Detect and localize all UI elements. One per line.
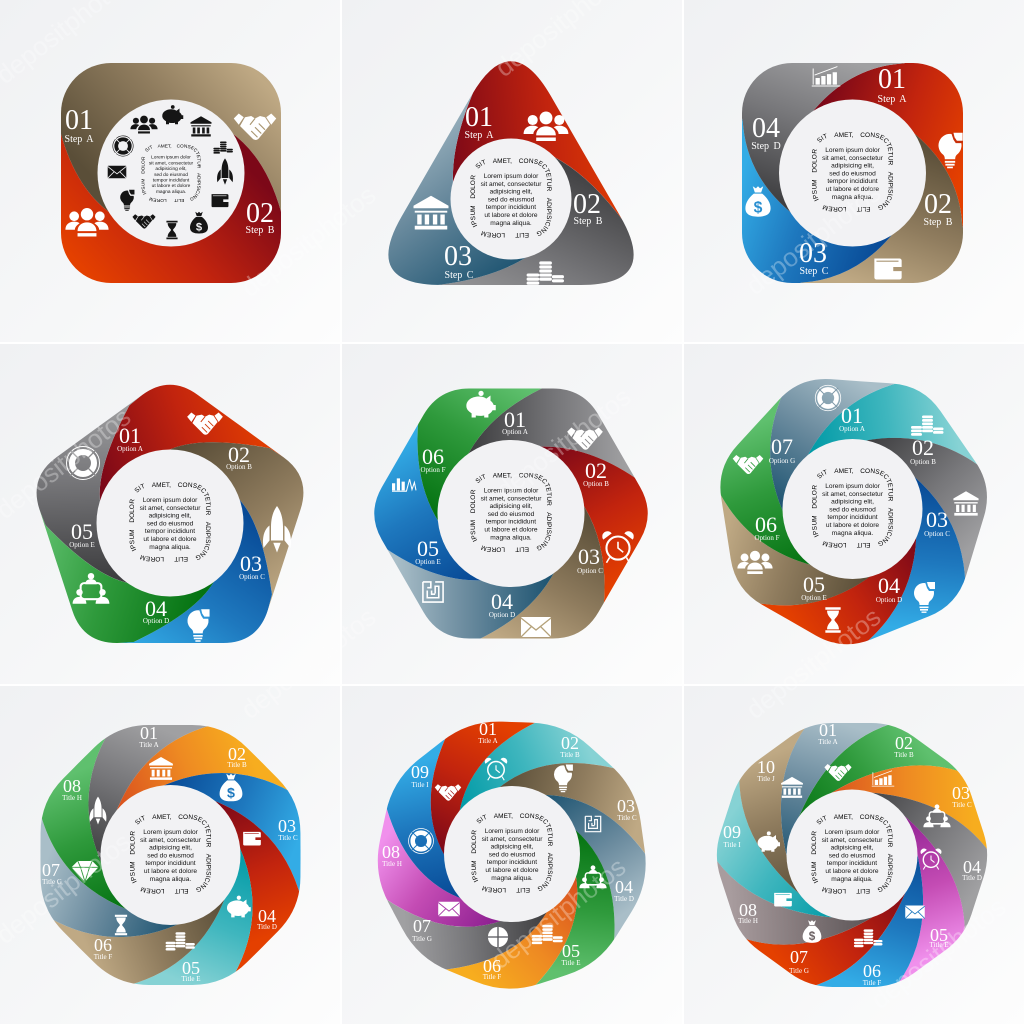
title labels: 01 (819, 720, 837, 740)
title labels: 01 (479, 719, 497, 739)
option labels: Option B (583, 480, 609, 488)
step labels: 02 (573, 189, 601, 220)
blades and ring: sed do eiusmod (488, 196, 535, 203)
watermark: depositphotos (235, 179, 381, 303)
blades and ring: adipisicing elit, (831, 499, 874, 506)
option labels: 01 (119, 423, 141, 448)
option labels: 06 (755, 512, 777, 537)
title labels: 02 (561, 733, 579, 753)
blades and ring: sed do eiusmod (489, 851, 536, 858)
blades and ring: LOREM IPSUM DOLOR SIT AMET, CONSECTETUR ADIPISICING ELIT (812, 814, 892, 894)
title labels: 08 (739, 900, 757, 920)
title labels: 07 (42, 860, 60, 880)
step labels: Step B (246, 225, 275, 236)
title labels: 04 (615, 877, 633, 897)
blades and ring: sed do eiusmod (147, 852, 194, 859)
title labels (382, 719, 637, 981)
step labels (65, 105, 275, 236)
watermark: depositphotos (485, 851, 631, 975)
blades and ring: LOREM IPSUM DOLOR SIT AMET, CONSECTETUR ADIPISICING ELIT (470, 473, 552, 552)
blades and ring: tempor incididunt (486, 204, 536, 211)
title labels: 06 (863, 961, 881, 981)
blades and ring: sit amet, consectetur (481, 181, 542, 188)
title labels: 02 (895, 733, 913, 753)
blades and ring: magna aliqua. (490, 220, 532, 227)
option labels: Option D (143, 617, 169, 625)
option labels (69, 423, 265, 625)
title labels: Title C (617, 814, 637, 822)
blades and ring: LOREM IPSUM DOLOR SIT AMET, CONSECTETUR ADIPISICING ELIT (141, 144, 201, 202)
option labels: Option F (420, 466, 446, 474)
blades and ring: Lorem ipsum dolor (143, 829, 199, 836)
option labels: 04 (878, 573, 900, 598)
blades and ring: tempor incididunt (487, 859, 537, 866)
title labels: 07 (790, 947, 808, 967)
icons (409, 758, 607, 947)
option labels: 01 (504, 407, 526, 432)
step labels: 04 (752, 113, 780, 144)
blades and ring: tempor incididunt (827, 514, 878, 521)
blades and ring: Lorem ipsum dolor (825, 147, 881, 154)
blades and ring: adipisicing elit, (831, 163, 874, 170)
watermark: depositphotos (865, 891, 1011, 1015)
option labels: 04 (145, 596, 167, 621)
option labels: Option A (502, 428, 528, 436)
title labels: 05 (562, 941, 580, 961)
step labels: 03 (444, 241, 472, 272)
icons (65, 105, 276, 239)
blades and ring: sed do eiusmod (147, 520, 194, 527)
icons (733, 385, 979, 633)
option labels: Option A (117, 445, 143, 453)
option labels: Option E (69, 541, 95, 549)
blades and ring (378, 722, 646, 989)
option labels: Option E (801, 594, 827, 602)
option labels (415, 407, 609, 619)
panel: 4 step rounded square (742, 63, 963, 283)
blades and ring (61, 63, 281, 283)
blades and ring: Lorem ipsum dolor (484, 488, 539, 494)
blades and ring: magna aliqua. (150, 876, 191, 883)
blades and ring: ut labore et dolore (485, 867, 539, 874)
blades and ring: sed do eiusmod (154, 172, 188, 178)
blades and ring: tempor incididunt (153, 177, 190, 183)
title labels: 07 (413, 916, 431, 936)
title labels: Title I (411, 781, 429, 789)
title labels: Title D (962, 874, 982, 882)
blades and ring: ut labore et dolore (144, 868, 197, 875)
panel: 7 option heptagon (720, 379, 987, 644)
title labels: Title G (412, 935, 432, 943)
blades and ring: magna aliqua. (149, 544, 191, 551)
title labels: Title C (952, 801, 972, 809)
icons (66, 412, 291, 642)
blades and ring: adipisicing elit, (490, 189, 533, 196)
option labels: 03 (926, 507, 948, 532)
panel: 5 option pentagon (36, 384, 304, 643)
blades and ring: LOREM IPSUM DOLOR SIT AMET, CONSECTETUR ADIPISICING ELIT (470, 158, 552, 238)
step labels (444, 102, 603, 281)
step labels: Step A (878, 94, 907, 105)
option labels: Option F (754, 534, 780, 542)
title labels: 03 (278, 816, 296, 836)
blades and ring: Lorem ipsum dolor (825, 483, 881, 490)
option labels: 02 (912, 435, 934, 460)
blades and ring: sed do eiusmod (488, 511, 535, 518)
blades and ring: sit amet, consectetur (822, 155, 884, 162)
blades and ring: ut labore et dolore (825, 868, 879, 875)
panel: 10 title decagon (716, 720, 988, 987)
option labels: Option C (577, 567, 603, 575)
title labels: Title B (894, 751, 914, 759)
blades and ring: tempor incididunt (827, 860, 877, 867)
blades and ring: tempor incididunt (145, 860, 196, 867)
option labels: 05 (417, 536, 439, 561)
icons (758, 764, 951, 947)
step labels: Step A (465, 130, 494, 141)
blades and ring: Lorem ipsum dolor (485, 828, 540, 835)
title labels: 01 (140, 723, 158, 743)
blades and ring: LOREM IPSUM DOLOR SIT AMET, CONSECTETUR ADIPISICING ELIT (472, 814, 552, 892)
title labels: Title F (863, 979, 881, 987)
title labels (723, 720, 982, 987)
option labels: Option E (415, 558, 441, 566)
title labels: Title H (738, 917, 758, 925)
step labels: 03 (799, 238, 827, 269)
title labels: Title E (182, 975, 200, 983)
title labels: 03 (952, 783, 970, 803)
option labels: 04 (491, 589, 513, 614)
blades and ring: tempor incididunt (486, 519, 536, 526)
option labels: Option B (910, 458, 936, 466)
title labels: 05 (182, 958, 200, 978)
watermark: depositphotos (740, 601, 886, 725)
icons (745, 67, 963, 280)
blades and ring: adipisicing elit, (491, 844, 534, 851)
title labels: Title B (560, 751, 580, 759)
panel: 6 option hexagon (374, 388, 648, 638)
blades and ring: sed do eiusmod (829, 852, 876, 859)
title labels: Title H (62, 794, 82, 802)
option labels: 01 (841, 403, 863, 428)
title labels: 08 (382, 842, 400, 862)
watermark: depositphotos (490, 381, 636, 505)
option labels: Option C (924, 530, 950, 538)
blades and ring: sit amet, consectetur (140, 505, 201, 512)
title labels: 04 (963, 857, 981, 877)
title labels: Title A (139, 741, 159, 749)
blades and ring: adipisicing elit, (831, 845, 874, 852)
title labels: Title A (818, 738, 838, 746)
blades and ring: magna aliqua. (156, 189, 186, 195)
step labels: Step D (751, 141, 781, 152)
blades and ring: ut labore et dolore (143, 536, 197, 543)
option labels: 03 (578, 544, 600, 569)
blades and ring: sed do eiusmod (829, 170, 876, 177)
blades and ring (40, 725, 301, 985)
title labels: Title E (930, 941, 948, 949)
option labels: 05 (71, 519, 93, 544)
blades and ring: Lorem ipsum dolor (151, 155, 191, 161)
title labels: 05 (930, 925, 948, 945)
title labels: 08 (63, 776, 81, 796)
panel: 3 step rounded triangle (388, 61, 634, 285)
option labels: 05 (803, 572, 825, 597)
blades and ring: magna aliqua. (490, 534, 532, 541)
step labels: Step B (924, 217, 953, 228)
blades and ring: sit amet, consectetur (822, 837, 883, 844)
blades and ring: LOREM IPSUM DOLOR SIT AMET, CONSECTETUR ADIPISICING ELIT (130, 814, 211, 894)
step labels: Step A (65, 134, 94, 145)
icons (414, 111, 568, 285)
option labels: Option D (489, 611, 515, 619)
step labels: 02 (246, 198, 274, 229)
option labels: Option A (839, 425, 865, 433)
title labels: Title G (42, 878, 62, 886)
blades and ring (374, 388, 648, 638)
blades and ring: sed do eiusmod (829, 506, 876, 513)
blades and ring: sit amet, consectetur (482, 836, 543, 843)
blades and ring: sit amet, consectetur (149, 160, 194, 166)
blades and ring: Lorem ipsum dolor (484, 173, 539, 180)
blades and ring: sit amet, consectetur (140, 837, 202, 844)
title labels: Title H (382, 860, 402, 868)
panel: 2 step rounded square (61, 63, 281, 283)
blades and ring: magna aliqua. (832, 194, 873, 201)
step labels: 02 (924, 189, 952, 220)
blades and ring: adipisicing elit, (155, 166, 187, 172)
blades and ring: ut labore et dolore (826, 186, 879, 193)
blades and ring: LOREM IPSUM DOLOR SIT AMET, CONSECTETUR ADIPISICING ELIT (130, 482, 210, 562)
title labels: 10 (757, 757, 775, 777)
blades and ring: magna aliqua. (832, 530, 873, 537)
blades and ring (720, 379, 987, 644)
watermark: depositphotos (740, 177, 886, 301)
title labels: 06 (94, 935, 112, 955)
title labels (42, 723, 298, 983)
blades and ring: LOREM IPSUM DOLOR SIT AMET, CONSECTETUR ADIPISICING ELIT (812, 132, 893, 212)
blades and ring: adipisicing elit, (149, 845, 192, 852)
blades and ring: ut labore et dolore (826, 522, 879, 529)
blades and ring: sit amet, consectetur (822, 491, 884, 498)
panel: 9 title nonagon (378, 719, 646, 989)
title labels: 06 (483, 956, 501, 976)
blades and ring: tempor incididunt (827, 178, 878, 185)
option labels: Option B (226, 463, 252, 471)
step labels (751, 64, 953, 277)
watermark: depositphotos (235, 601, 381, 725)
title labels: 09 (411, 762, 429, 782)
option labels: Option G (769, 457, 795, 465)
blades and ring (716, 723, 988, 987)
title labels: 09 (723, 822, 741, 842)
step labels: Step C (800, 266, 829, 277)
title labels: Title D (614, 895, 634, 903)
blades and ring: Lorem ipsum dolor (825, 829, 880, 836)
title labels: Title C (278, 834, 298, 842)
title labels: 04 (258, 906, 276, 926)
blades and ring: LOREM IPSUM DOLOR SIT AMET, CONSECTETUR ADIPISICING ELIT (812, 468, 893, 548)
blades and ring: ut labore et dolore (484, 526, 538, 534)
step labels: 01 (65, 105, 93, 136)
title labels: Title A (478, 737, 498, 745)
blades and ring: sit amet, consectetur (481, 495, 542, 502)
title labels: Title D (257, 923, 277, 931)
option labels: 07 (771, 434, 793, 459)
title labels: Title G (789, 967, 809, 975)
title labels: 02 (228, 744, 246, 764)
title labels: Title F (483, 973, 501, 981)
blades and ring (36, 384, 304, 643)
title labels: Title F (94, 953, 112, 961)
option labels: 06 (422, 444, 444, 469)
option labels (754, 403, 950, 604)
option labels: Option C (239, 573, 265, 581)
blades and ring: magna aliqua. (491, 875, 533, 882)
step labels: Step C (445, 270, 474, 281)
blades and ring: Lorem ipsum dolor (143, 497, 198, 504)
title labels: Title J (757, 775, 775, 783)
title labels: Title E (562, 959, 580, 967)
step labels: Step B (574, 216, 603, 227)
blades and ring: ut labore et dolore (484, 212, 538, 219)
panel: 8 title octagon (40, 723, 301, 985)
blades and ring: magna aliqua. (831, 876, 873, 883)
title labels: Title I (723, 841, 741, 849)
blades and ring: adipisicing elit, (149, 513, 192, 520)
option labels: Option D (876, 596, 902, 604)
icons (392, 391, 634, 637)
option labels: 02 (585, 458, 607, 483)
icons (72, 757, 261, 951)
blades and ring: tempor incididunt (145, 528, 195, 535)
blades and ring (388, 61, 634, 285)
option labels: 02 (228, 442, 250, 467)
title labels: 03 (617, 796, 635, 816)
option labels: 03 (240, 551, 262, 576)
title labels: Title B (227, 761, 247, 769)
step labels: 01 (465, 102, 493, 133)
step labels: 01 (878, 64, 906, 95)
blades and ring (742, 63, 963, 283)
blades and ring: ut labore et dolore (152, 183, 191, 189)
blades and ring: adipisicing elit, (490, 503, 533, 510)
